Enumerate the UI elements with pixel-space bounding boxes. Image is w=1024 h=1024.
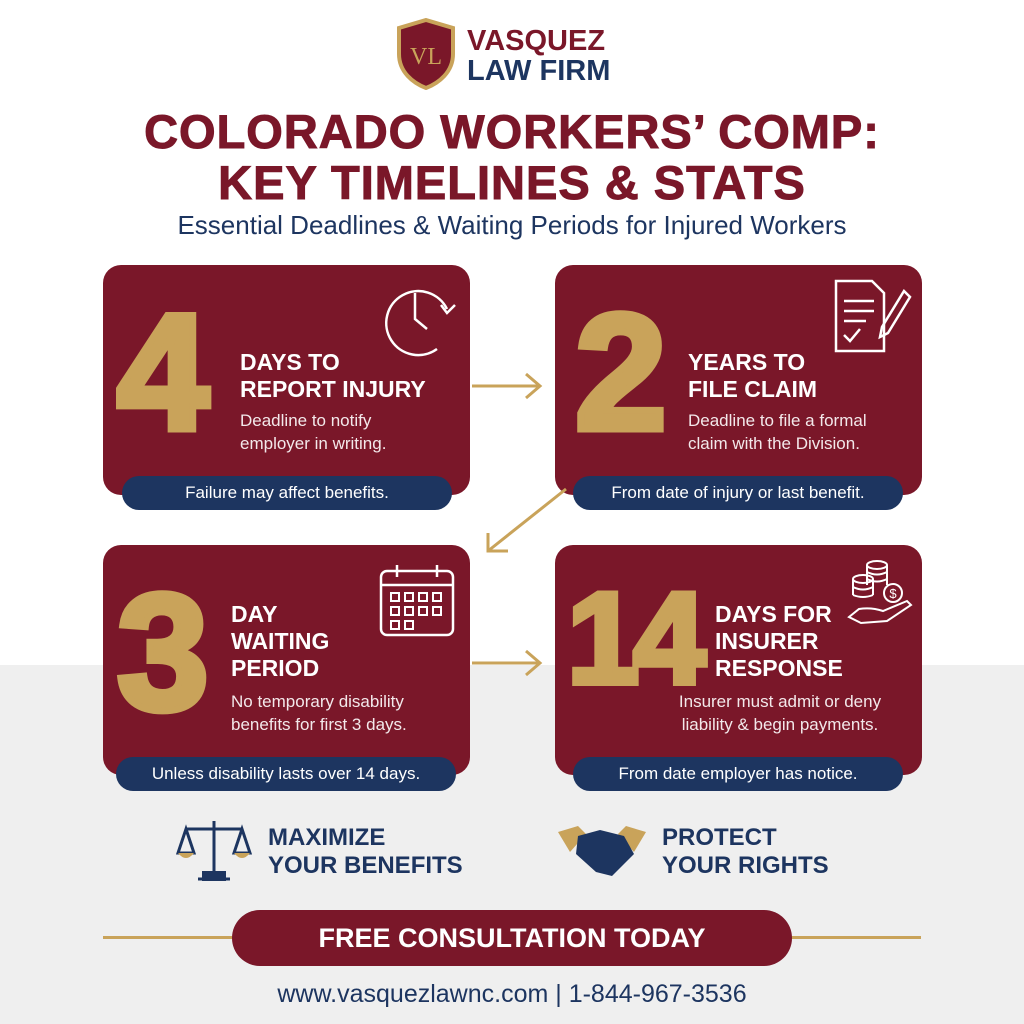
logo (397, 18, 610, 90)
icon: document pen (834, 280, 912, 352)
panel: 3 day: benefits for first 3 days. (231, 715, 407, 734)
panel: 2 years: YEARS TO (688, 349, 805, 375)
arrow: diagonal (486, 488, 567, 552)
logo text (467, 25, 610, 87)
text: protect: PROTECT (662, 824, 777, 851)
pill: unless (116, 757, 456, 791)
panel: 4 days: Deadline to notify (240, 411, 371, 430)
panel: 4 days: DAYS TO (240, 349, 340, 375)
text: maximize (268, 824, 463, 879)
logo text: LAW FIRM (467, 55, 610, 87)
logo text: VASQUEZ (467, 25, 605, 57)
text: protect (662, 824, 829, 879)
subtitle: Essential Deadlines & Waiting Periods for Injured Workers (177, 210, 847, 240)
panel: 14 days: liability & begin payments. (682, 715, 878, 734)
panel: 14 days: INSURER (715, 628, 819, 654)
panel: 14 days: 14 (567, 565, 700, 711)
panel: 14 days: Insurer must admit or deny (679, 692, 881, 711)
footer contact: www.vasquezlawnc.com | 1-844-967-3536 (277, 980, 747, 1008)
panel: 2 years: FILE CLAIM (688, 376, 817, 402)
panel: 4 days: employer in writing. (240, 434, 386, 453)
icon: shield: VL (410, 44, 442, 70)
panel: 4 days: 4 (117, 280, 209, 464)
title (144, 105, 880, 209)
icon: coins hand: $ (889, 586, 897, 601)
pill: from date employer: From date employer has notice. (618, 764, 858, 783)
arrow (472, 373, 542, 399)
panel: 3 day: No temporary disability (231, 692, 404, 711)
panel: 3 day: DAY (231, 601, 277, 627)
panel: 3 day: PERIOD (231, 655, 319, 681)
panel: 3 day: 3 (117, 560, 209, 744)
panel: 3 day (103, 545, 470, 775)
text: maximize: YOUR BENEFITS (268, 852, 463, 879)
pill: from date of injury (573, 476, 903, 510)
panel: 2 years: Deadline to file a formal (688, 411, 867, 430)
icon: scales (176, 821, 252, 881)
icon: handshake (558, 826, 646, 876)
panel: 4 days (103, 265, 470, 495)
cta button (232, 910, 792, 966)
icon: coins hand (847, 560, 912, 624)
icon: shield (397, 18, 455, 90)
panel: 2 years (555, 265, 922, 495)
title: KEY TIMELINES & STATS (218, 156, 806, 209)
text: maximize: MAXIMIZE (268, 824, 385, 851)
pill: failure (122, 476, 452, 510)
pill: from date employer (573, 757, 903, 791)
cta button: FREE CONSULTATION TODAY (318, 923, 706, 953)
icon: clock (385, 290, 456, 356)
panel: 4 days: REPORT INJURY (240, 376, 426, 402)
pill: unless: Unless disability lasts over 14 days. (152, 764, 420, 783)
pill: from date of injury: From date of injury or last benefit. (611, 483, 865, 502)
icon: calendar (380, 565, 454, 636)
panel: 14 days (555, 545, 922, 775)
panel: 14 days: RESPONSE (715, 655, 843, 681)
panel: 2 years: claim with the Division. (688, 434, 860, 453)
panel: 2 years: 2 (575, 280, 667, 464)
arrow (472, 650, 542, 676)
text: protect: YOUR RIGHTS (662, 852, 829, 879)
title: COLORADO WORKERS’ COMP: (144, 105, 880, 158)
panel: 3 day: WAITING (231, 628, 329, 654)
panel: 14 days: DAYS FOR (715, 601, 832, 627)
pill: failure: Failure may affect benefits. (185, 483, 389, 502)
